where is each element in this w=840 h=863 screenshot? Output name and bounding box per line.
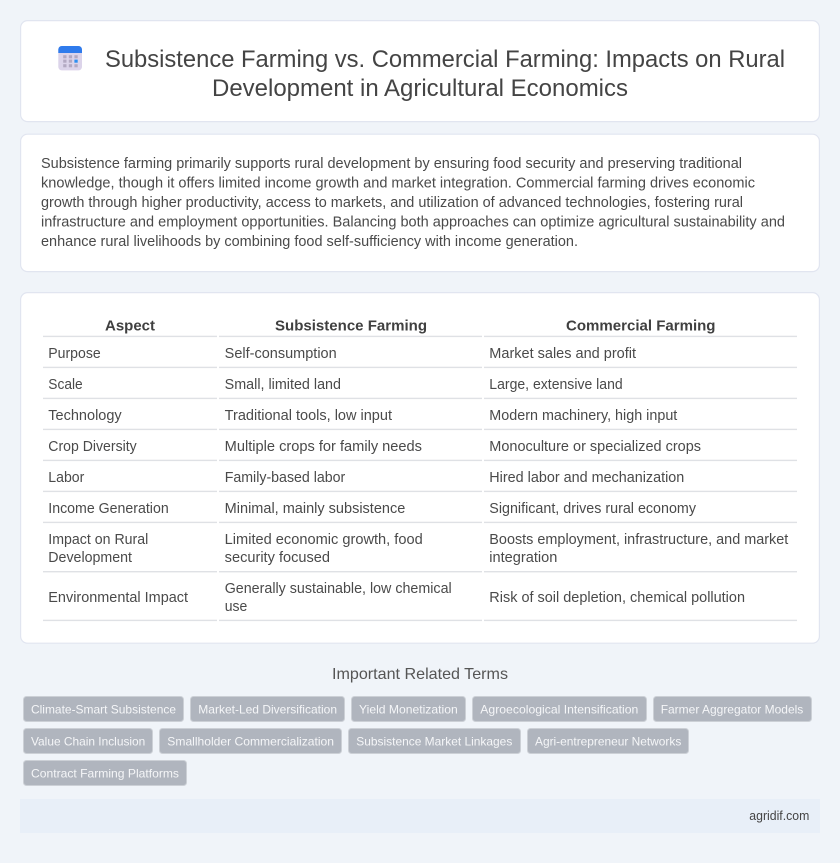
- row: impact on rural development: Impact on Rural: [48, 532, 148, 548]
- table header row: [105, 319, 716, 335]
- text block: summary paragraph: Subsistence farming primarily supports rural development by ensuring food security and preserving traditional: [41, 156, 742, 172]
- tag: [160, 728, 342, 754]
- row: scale: Small, limited land: [225, 377, 341, 393]
- row: technology: Modern machinery, high input: [489, 408, 677, 424]
- text block: summary paragraph: growth through higher productivity, access to markets, and utilization of advanced technologies, fostering rural: [41, 195, 743, 211]
- tag: Farmer Aggregator Models: [661, 702, 803, 716]
- panel: introduction: [21, 134, 819, 272]
- row: environmental impact: Environmental Impact: [48, 590, 188, 606]
- row: purpose: Self-consumption: [225, 346, 337, 362]
- panel: header: [21, 21, 819, 122]
- row: crop diversity: [48, 439, 701, 455]
- title: Development in Agricultural Economics: [212, 75, 628, 102]
- tag: Agri-entrepreneur Networks: [535, 734, 681, 748]
- tag: Value Chain Inclusion: [31, 734, 145, 748]
- text block: summary paragraph: knowledge, though it offers limited income growth and market integration. Commercial farming drives economic: [41, 176, 755, 192]
- tag: [24, 696, 184, 722]
- row: technology: Traditional tools, low input: [225, 408, 392, 424]
- row: impact on rural development: integration: [489, 550, 557, 566]
- row: technology: [48, 408, 677, 424]
- icon: calendar: [58, 46, 82, 70]
- title: [105, 46, 785, 102]
- tag: Climate-Smart Subsistence: [31, 702, 176, 716]
- tag: [24, 728, 152, 754]
- row: technology: Technology: [48, 408, 123, 424]
- tag: Smallholder Commercialization: [167, 734, 334, 748]
- row: scale: Scale: [48, 377, 83, 393]
- text block: summary paragraph: enhance rural livelihoods by combining food self-sufficiency with income generation.: [41, 234, 578, 250]
- row: environmental impact: Generally sustainable, low chemical: [225, 581, 452, 597]
- row: environmental impact: use: [225, 599, 247, 615]
- tag: [190, 696, 344, 722]
- tag: Contract Farming Platforms: [31, 766, 179, 780]
- tag: [654, 696, 812, 722]
- text block: summary paragraph: infrastructure and employment opportunities. Balancing both approaches can optimize agricultural sustainability and: [41, 215, 785, 231]
- row: impact on rural development: Development: [48, 550, 132, 566]
- row: income generation: [48, 501, 697, 517]
- tag: Market-Led Diversification: [198, 702, 337, 716]
- row: purpose: Purpose: [48, 346, 101, 362]
- tag: [348, 728, 520, 754]
- text block: summary paragraph: [41, 156, 785, 250]
- heading: important related terms: Important Related Terms: [332, 666, 508, 683]
- title: Subsistence Farming vs. Commercial Farming: Impacts on Rural: [105, 46, 785, 73]
- table header row: Aspect: [105, 319, 155, 335]
- row: scale: Large, extensive land: [489, 377, 623, 393]
- row: environmental impact: [48, 581, 745, 615]
- row: labor: Family-based labor: [225, 470, 346, 486]
- footer bar: [20, 799, 820, 833]
- row: environmental impact: Risk of soil depletion, chemical pollution: [489, 590, 745, 606]
- tag: [24, 760, 186, 786]
- panel: comparison table: [21, 293, 819, 643]
- tag: Subsistence Market Linkages: [356, 734, 512, 748]
- tag: [352, 696, 466, 722]
- row: impact on rural development: Limited economic growth, food: [225, 532, 423, 548]
- row: income generation: Minimal, mainly subsistence: [225, 501, 405, 517]
- row: purpose: [48, 346, 636, 362]
- table header row: Commercial Farming: [566, 319, 716, 335]
- row: labor: Labor: [48, 470, 85, 486]
- row: income generation: Income Generation: [48, 501, 169, 517]
- footer source text: agridif.com: [749, 809, 809, 823]
- row: scale: [48, 377, 623, 393]
- row: income generation: Significant, drives rural economy: [489, 501, 697, 517]
- row: impact on rural development: security focused: [225, 550, 330, 566]
- row: labor: Hired labor and mechanization: [489, 470, 684, 486]
- row: impact on rural development: [48, 532, 788, 566]
- tag: [472, 696, 646, 722]
- row: crop diversity: Multiple crops for family needs: [225, 439, 422, 455]
- row: crop diversity: Crop Diversity: [48, 439, 138, 455]
- table header row: Subsistence Farming: [275, 319, 427, 335]
- related term tags: [24, 696, 812, 786]
- tag: Agroecological Intensification: [480, 702, 638, 716]
- row: purpose: Market sales and profit: [489, 346, 636, 362]
- tag: [528, 728, 688, 754]
- tag: Yield Monetization: [359, 702, 458, 716]
- row: impact on rural development: Boosts employment, infrastructure, and market: [489, 532, 788, 548]
- row: crop diversity: Monoculture or specialized crops: [489, 439, 701, 455]
- row: labor: [48, 470, 684, 486]
